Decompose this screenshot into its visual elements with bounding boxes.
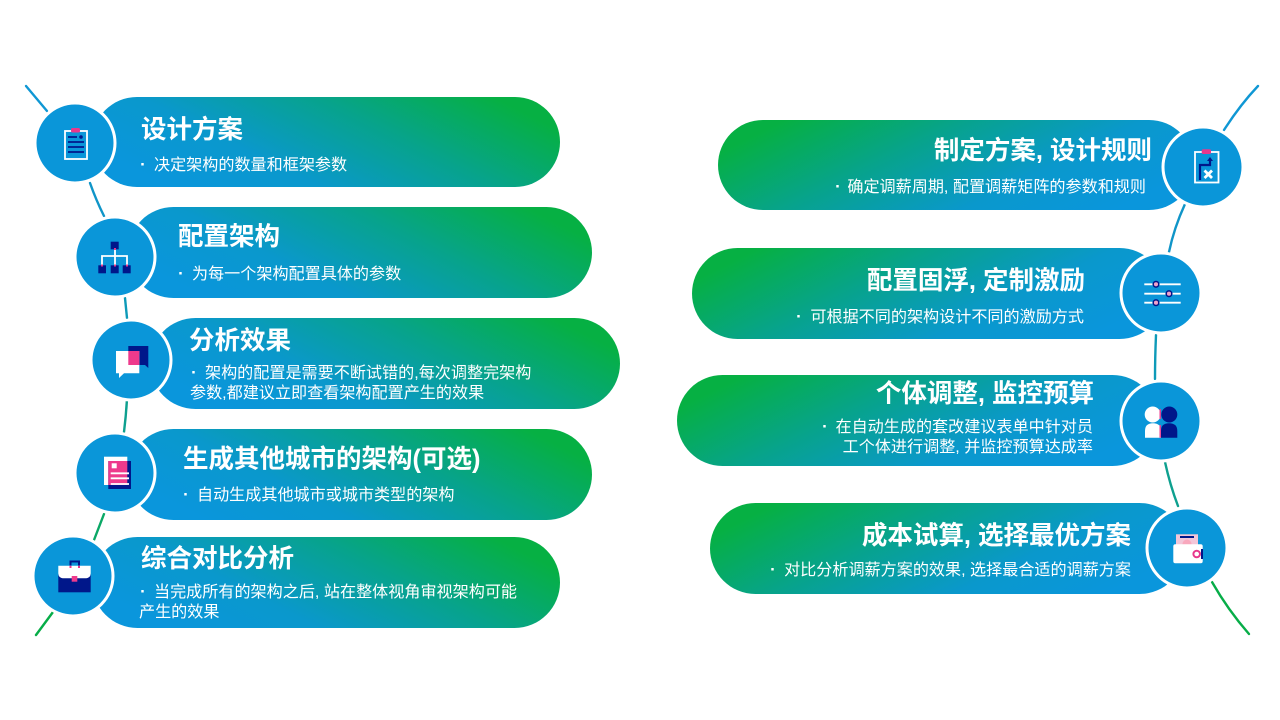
panel: 分析效果 — [91, 318, 620, 409]
icon: briefcase — [58, 562, 91, 592]
description: 可根据不同的架构设计不同的激励方式 — [810, 308, 1084, 326]
description: · — [796, 307, 802, 326]
panel: 制定方案, 设计规则 — [718, 120, 1243, 210]
panel: 配置固浮, 定制激励 — [692, 248, 1201, 339]
icon: clipboard with arrow — [1195, 149, 1218, 182]
heading: 分析效果 — [189, 327, 291, 355]
description: 自动生成其他城市或城市类型的架构 — [197, 486, 454, 504]
description: 对比分析调薪方案的效果, 选择最合适的调薪方案 — [784, 561, 1131, 579]
heading: 个体调整, 监控预算 — [876, 380, 1094, 408]
description: · — [835, 177, 841, 196]
description: · — [140, 582, 146, 601]
description: 确定调薪周期, 配置调薪矩阵的参数和规则 — [847, 178, 1146, 196]
description: · — [178, 264, 184, 283]
description: 在自动生成的套改建议表单中针对员 — [836, 418, 1093, 436]
icon: sliders — [1144, 282, 1181, 306]
description: 为每一个架构配置具体的参数 — [192, 265, 401, 283]
panel: 综合对比分析 — [33, 536, 560, 628]
heading: 综合对比分析 — [141, 545, 294, 573]
description: · — [191, 363, 197, 382]
description: · — [140, 155, 146, 174]
icon: speech bubbles — [116, 346, 148, 378]
panel: 配置架构 — [75, 207, 592, 298]
icon: document — [104, 457, 131, 489]
panel: 设计方案 — [35, 97, 560, 187]
description — [190, 363, 531, 402]
heading: 设计方案 — [141, 115, 244, 144]
description: 参数,都建议立即查看架构配置产生的效果 — [190, 384, 484, 402]
panel: 成本试算, 选择最优方案 — [710, 503, 1227, 594]
description: · — [770, 560, 776, 579]
heading: 配置固浮, 定制激励 — [867, 267, 1085, 295]
heading: 制定方案, 设计规则 — [934, 136, 1152, 165]
description: · — [183, 485, 189, 504]
heading: 配置架构 — [178, 223, 280, 251]
description — [822, 417, 1093, 456]
description: 当完成所有的架构之后, 站在整体视角审视架构可能 — [154, 583, 517, 601]
panel: 生成其他城市的架构 — [75, 429, 592, 520]
heading: 成本试算, 选择最优方案 — [862, 521, 1131, 550]
icon: wallet — [1173, 534, 1203, 563]
icon: clipboard — [65, 128, 87, 159]
description — [139, 582, 517, 621]
description: 产生的效果 — [139, 603, 219, 621]
heading: 生成其他城市的架构(可选) — [183, 444, 480, 474]
connector line: right timeline — [1155, 86, 1258, 634]
icon: two people — [1145, 406, 1177, 438]
connector line: left timeline — [26, 86, 127, 635]
description: 工个体进行调整, 并监控预算达成率 — [843, 437, 1093, 456]
description: · — [822, 417, 828, 436]
icon: organisation chart — [98, 242, 131, 273]
panel: 个体调整, 监控预算 — [677, 375, 1201, 466]
description: 决定架构的数量和框架参数 — [154, 156, 347, 174]
description: 架构的配置是需要不断试错的,每次调整完架构 — [205, 364, 531, 382]
